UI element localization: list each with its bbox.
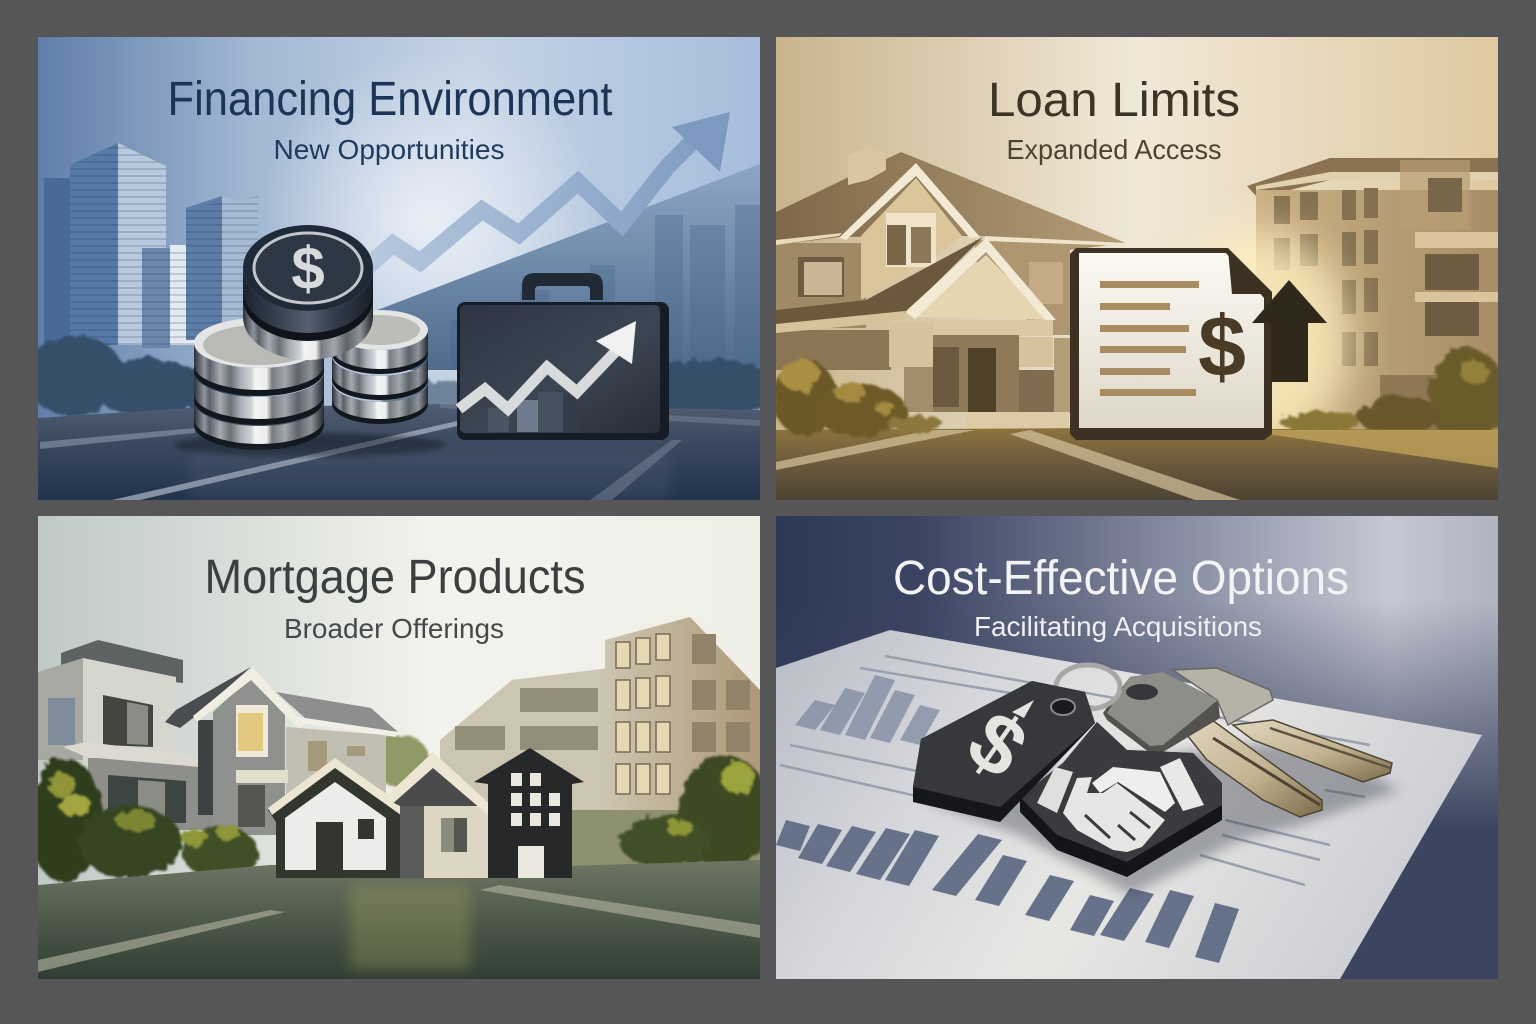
upper faded bar chart <box>795 675 940 745</box>
panel: loan limits <box>773 37 1506 500</box>
subtitle: Facilitating Acquisitions <box>974 611 1262 642</box>
left bushes <box>773 359 943 436</box>
panel: mortgage products <box>27 516 771 979</box>
subtitle: New Opportunities <box>274 134 504 165</box>
lower roof <box>776 237 983 326</box>
main roof <box>776 152 1126 245</box>
sky background <box>776 37 1498 430</box>
green bushes <box>27 756 771 882</box>
rising background arrow <box>366 112 730 268</box>
icon: beige house <box>382 752 494 878</box>
top coin: $ <box>291 235 325 302</box>
title: Financing Environment <box>168 73 612 126</box>
faded skyline <box>44 143 760 370</box>
icon: coin stacks <box>175 225 445 457</box>
panel: cost-effective options <box>776 516 1498 979</box>
house <box>776 148 1126 430</box>
icon: keys <box>1056 665 1392 817</box>
title: Cost-Effective Options <box>893 552 1349 605</box>
right side house <box>276 692 398 795</box>
driveway <box>776 428 1498 500</box>
upper gable <box>861 178 962 300</box>
sky background <box>38 37 760 418</box>
back key <box>1173 668 1392 782</box>
icon: document with dollar: $ <box>1198 299 1246 395</box>
sky background <box>38 516 760 885</box>
title: Loan Limits <box>988 74 1240 127</box>
left wall <box>776 243 866 328</box>
top coin <box>243 225 373 360</box>
lower gable <box>916 255 1050 320</box>
modern house <box>38 640 213 830</box>
warm glow <box>1218 207 1375 429</box>
chimney <box>848 152 886 185</box>
office tower <box>440 617 760 810</box>
lower wall <box>776 330 891 370</box>
front key <box>1103 672 1322 817</box>
icon: up arrow <box>1252 280 1327 382</box>
road <box>38 403 760 500</box>
dark background <box>776 516 1498 979</box>
road <box>38 860 760 979</box>
coin shadow <box>175 433 445 457</box>
icon: white house <box>268 758 410 878</box>
left window <box>798 257 844 297</box>
subtitle: Expanded Access <box>1006 134 1222 165</box>
apartment building <box>1247 158 1498 430</box>
icon: handshake badge <box>1020 722 1222 877</box>
title: Mortgage Products <box>204 551 586 604</box>
lower bar chart <box>776 820 1239 963</box>
key ring <box>1056 665 1120 709</box>
right stack <box>332 310 428 424</box>
table surface <box>776 600 1498 979</box>
subtitle: Broader Offerings <box>284 613 504 644</box>
reflection <box>194 453 666 497</box>
icon: dark building <box>474 748 584 878</box>
left stack <box>194 318 324 450</box>
right wing wall <box>975 240 1108 335</box>
sky glow <box>282 82 569 310</box>
background tree <box>362 734 430 786</box>
right bushes <box>1278 344 1498 430</box>
trees <box>25 336 780 418</box>
document lines <box>780 656 1370 885</box>
icon: price tag: $ <box>951 692 1044 796</box>
lower background fill <box>400 810 760 870</box>
icon: price tag <box>913 681 1095 822</box>
key shadow <box>925 740 1400 895</box>
panel: financing environment <box>25 37 780 500</box>
paper document <box>776 630 1482 979</box>
icon: document with dollar <box>1070 248 1272 440</box>
gable house <box>165 667 305 835</box>
icon: briefcase <box>457 273 669 440</box>
